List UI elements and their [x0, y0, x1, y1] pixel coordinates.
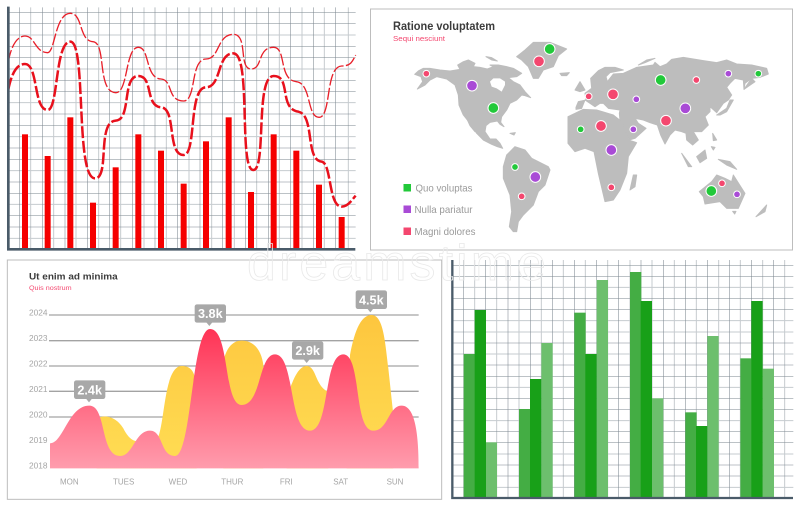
panel: area chart: 4.5k [359, 293, 385, 307]
panel: red bar and line chart [8, 7, 356, 249]
year axis: 2022 [29, 359, 48, 369]
day axis [60, 478, 404, 487]
area chart heading: Ut enim ad minima [29, 271, 119, 281]
panel: area chart [7, 260, 442, 499]
map subheading: Sequi nesciunt [393, 34, 446, 43]
map: Eurasia, Africa, Oceania [568, 57, 768, 217]
map heading: Ratione voluptatem [393, 21, 495, 33]
thick dashed line [8, 42, 356, 207]
year axis: 2018 [29, 460, 48, 470]
green chart axes [452, 260, 793, 498]
day axis: FRI [280, 478, 293, 487]
day axis: WED [169, 478, 188, 487]
panel: green bar chart [452, 260, 793, 498]
day axis: MON [60, 478, 79, 487]
map: Americas [415, 42, 569, 232]
day axis: TUES [113, 478, 134, 487]
panel: area chart: 2.4k [77, 383, 103, 397]
day axis: SUN [387, 478, 404, 487]
year axis [29, 307, 48, 470]
year axis: 2020 [29, 410, 48, 420]
map legend: Nulla pariatur [414, 204, 473, 216]
map markers [423, 44, 762, 200]
day axis: SAT [333, 478, 348, 487]
callouts [74, 290, 387, 402]
map legend [404, 182, 476, 238]
year axis: 2024 [29, 307, 48, 317]
red bars [22, 117, 345, 249]
panel: area chart: 3.8k [198, 307, 224, 321]
map legend: Magni dolores [414, 226, 476, 238]
year axis: 2023 [29, 333, 48, 343]
day axis: THUR [221, 478, 244, 487]
year axis: 2021 [29, 384, 48, 394]
yellow area [97, 315, 393, 468]
area chart subheading: Quis nostrum [29, 285, 72, 292]
thin dashed line [8, 13, 356, 117]
chart axes [8, 7, 355, 249]
red area [50, 329, 419, 468]
map legend: Quo voluptas [416, 182, 472, 194]
panel: area chart: 2.9k [295, 344, 321, 358]
panel: world map [370, 9, 792, 250]
green bars [464, 272, 774, 498]
year axis: 2019 [29, 435, 48, 445]
watermark: dreamstime [247, 235, 549, 291]
